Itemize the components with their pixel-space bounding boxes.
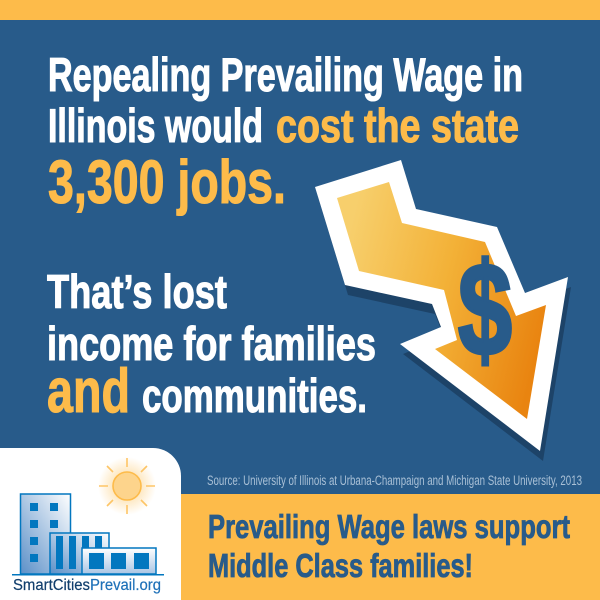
headline	[48, 48, 523, 216]
logo wordmark: Prevail.org	[90, 577, 161, 594]
logo wordmark: SmartCities	[13, 577, 90, 594]
logo wordmark	[13, 577, 161, 594]
icon: falling arrow with dollar sign	[315, 160, 571, 461]
icon: sun	[98, 457, 156, 515]
headline: cost the state	[276, 99, 519, 152]
secondary statement: and	[47, 357, 130, 426]
top accent bar	[0, 0, 600, 20]
headline: Illinois would	[48, 99, 263, 152]
headline: 3,300 jobs.	[48, 148, 286, 216]
icon: falling arrow with dollar sign: $	[458, 236, 512, 383]
secondary statement: income for families	[47, 317, 376, 370]
icon: city buildings	[12, 494, 164, 576]
secondary statement: That’s lost	[47, 265, 227, 318]
bottom banner: Middle Class families!	[208, 547, 473, 584]
secondary statement	[47, 265, 376, 426]
secondary statement: communities.	[142, 369, 367, 422]
logo panel	[0, 448, 181, 600]
bottom banner	[181, 494, 600, 600]
